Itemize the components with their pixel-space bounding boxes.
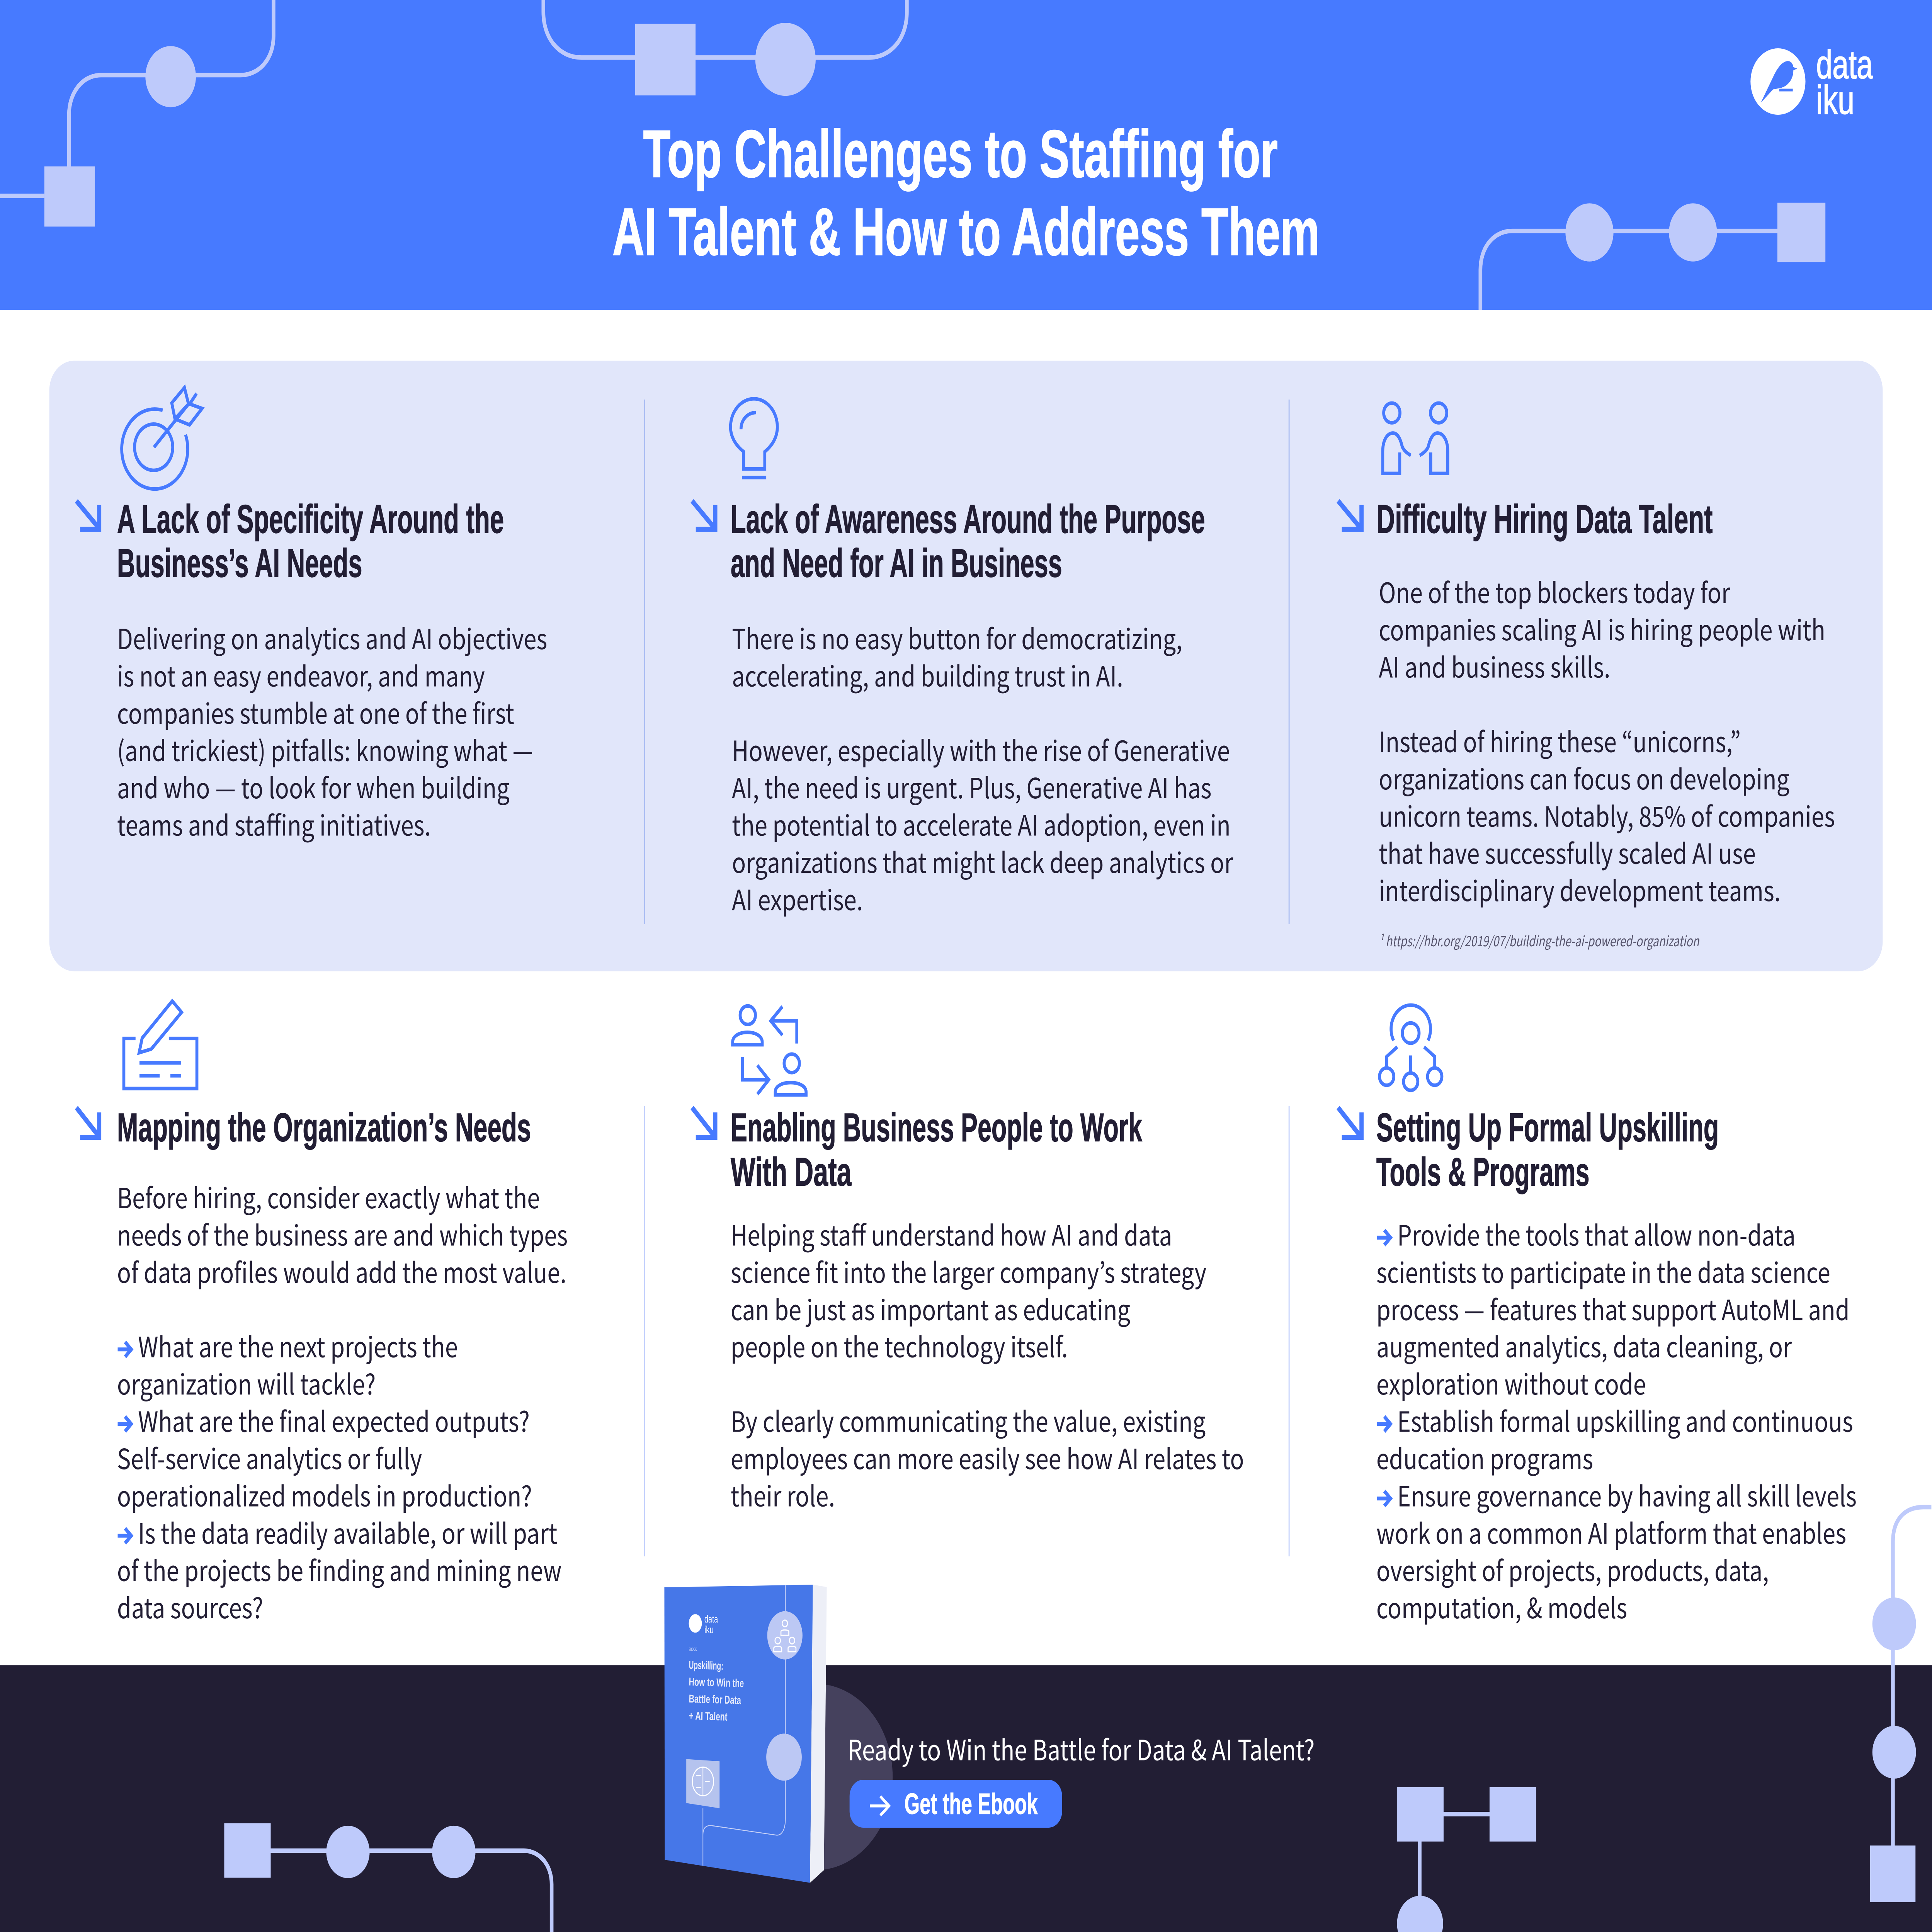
column divider bbox=[645, 400, 1289, 924]
heading: A Lack of Specificity Around the bbox=[117, 497, 504, 542]
cover title bbox=[689, 1647, 744, 1723]
background circle behind ebook bbox=[739, 1684, 893, 1870]
body text: interdisciplinary development teams. bbox=[1379, 869, 1781, 910]
heading bbox=[731, 497, 1205, 586]
body text: of the projects be finding and mining new bbox=[117, 1549, 562, 1589]
heading: Setting Up Formal Upskilling bbox=[1376, 1105, 1719, 1150]
logo: dataiku: iku bbox=[1816, 78, 1854, 122]
body text: unicorn teams. Notably, 85% of companies bbox=[1379, 794, 1835, 835]
body text: Before hiring, consider exactly what the bbox=[117, 1176, 540, 1217]
body text: Provide the tools that allow non-data bbox=[1397, 1214, 1796, 1254]
logo: dataiku bbox=[1750, 43, 1873, 122]
cover title: How to Win the bbox=[689, 1675, 744, 1690]
body text: Ensure governance by having all skill levels bbox=[1397, 1475, 1857, 1515]
body text: people on the technology itself. bbox=[731, 1325, 1068, 1366]
body text: their role. bbox=[731, 1475, 835, 1515]
cover title: + AI Talent bbox=[689, 1709, 728, 1723]
arrow marker bbox=[77, 1108, 99, 1138]
icon: target with arrow bbox=[122, 388, 202, 489]
body text: Self-service analytics or fully bbox=[117, 1437, 422, 1478]
body text: AI, the need is urgent. Plus, Generative AI has bbox=[732, 766, 1212, 807]
brain tile on cover bbox=[686, 1759, 719, 1808]
body text: science fit into the larger company’s strategy bbox=[731, 1251, 1206, 1291]
body text: There is no easy button for democratizing, bbox=[732, 617, 1182, 658]
decoration: right-edge circuit bbox=[1870, 1507, 1931, 1902]
heading bbox=[731, 1105, 1143, 1195]
body text: (and trickiest) pitfalls: knowing what — bbox=[117, 729, 533, 769]
arrow marker bbox=[692, 1108, 715, 1138]
body text: organizations can focus on developing bbox=[1379, 757, 1789, 798]
heading: With Data bbox=[731, 1150, 852, 1195]
button: get the ebook bbox=[850, 1780, 1062, 1828]
body text bbox=[1376, 1214, 1862, 1627]
body text: However, especially with the rise of Generative bbox=[732, 729, 1230, 769]
solution 1: mapping needs bbox=[77, 1001, 573, 1627]
body text: employees can more easily see how AI relates to bbox=[731, 1437, 1244, 1478]
icon: two people bbox=[1383, 403, 1448, 473]
body text: teams and staffing initiatives. bbox=[117, 804, 431, 844]
body text: data sources? bbox=[117, 1586, 263, 1627]
heading: and Need for AI in Business bbox=[731, 541, 1062, 586]
heading: Enabling Business People to Work bbox=[731, 1105, 1143, 1150]
body text: that have successfully scaled AI use bbox=[1379, 832, 1756, 872]
cover circles bbox=[766, 1611, 803, 1781]
challenge 2: lack of awareness bbox=[692, 399, 1238, 918]
cover title: Upskilling: bbox=[689, 1659, 723, 1672]
cover title: EBOOK bbox=[689, 1647, 697, 1652]
body text: AI expertise. bbox=[732, 878, 863, 918]
solution 2: enabling business people bbox=[692, 1006, 1249, 1515]
title: Top Challenges to Staffing for bbox=[643, 116, 1278, 191]
book front bbox=[664, 1585, 813, 1883]
footer band bbox=[0, 1507, 1932, 1932]
cover title: Battle for Data bbox=[689, 1692, 742, 1707]
body text bbox=[117, 1176, 573, 1627]
challenge 1: lack of specificity bbox=[77, 388, 553, 844]
decoration: top-center circuit bbox=[543, 0, 907, 96]
body text: process — features that support AutoML and bbox=[1376, 1288, 1850, 1328]
icon: people exchange bbox=[733, 1006, 806, 1095]
heading: Tools & Programs bbox=[1376, 1150, 1590, 1195]
header band bbox=[0, 0, 1932, 310]
body text: By clearly communicating the value, existing bbox=[731, 1400, 1206, 1440]
cover logo: iku bbox=[704, 1624, 714, 1636]
body text: Delivering on analytics and AI objectives bbox=[117, 617, 547, 658]
body text: organizations that might lack deep analytics or bbox=[732, 841, 1233, 881]
icon: document and pencil bbox=[124, 1001, 197, 1088]
heading: Business’s AI Needs bbox=[117, 541, 362, 586]
body text: of data profiles would add the most value. bbox=[117, 1251, 566, 1291]
body text: companies scaling AI is hiring people with bbox=[1379, 608, 1825, 649]
body text: operationalized models in production? bbox=[117, 1475, 532, 1515]
cover lines bbox=[703, 1585, 786, 1866]
body text: computation, & models bbox=[1376, 1586, 1627, 1627]
ebook cover bbox=[664, 1585, 827, 1883]
book pages bbox=[810, 1585, 827, 1883]
button: get the ebook: Get the Ebook bbox=[905, 1787, 1038, 1820]
decoration: footer-left circuit bbox=[224, 1823, 552, 1932]
body text: organization will tackle? bbox=[117, 1362, 376, 1403]
arrow marker bbox=[1338, 501, 1362, 529]
body text: scientists to participate in the data science bbox=[1376, 1251, 1830, 1291]
body text: work on a common AI platform that enables bbox=[1376, 1512, 1846, 1552]
solution 3: formal upskilling bbox=[1338, 1005, 1862, 1627]
logo: dataiku: data bbox=[1816, 43, 1873, 87]
icon: network bbox=[1379, 1005, 1442, 1090]
body text: accelerating, and building trust in AI. bbox=[732, 655, 1123, 695]
column dividers: solutions row bbox=[645, 1106, 1289, 1556]
cover logo bbox=[689, 1614, 718, 1636]
body text: exploration without code bbox=[1376, 1362, 1646, 1403]
body text: is not an easy endeavor, and many bbox=[117, 655, 485, 695]
bullet arrows bbox=[118, 1342, 131, 1543]
cover logo: data bbox=[704, 1614, 718, 1625]
decoration: top-right circuit bbox=[1480, 203, 1825, 310]
footnote: ¹ https://hbr.org/2019/07/building-the-ai-powered-organization bbox=[1379, 930, 1699, 951]
body text: oversight of projects, products, data, bbox=[1376, 1549, 1769, 1589]
body text: augmented analytics, data cleaning, or bbox=[1376, 1325, 1792, 1366]
body text: the potential to accelerate AI adoption, even in bbox=[732, 804, 1231, 844]
decoration: top-left circuit bbox=[0, 0, 274, 226]
arrow marker bbox=[692, 501, 715, 529]
title: AI Talent & How to Address Them bbox=[612, 194, 1320, 269]
body text: and who — to look for when building bbox=[117, 766, 510, 807]
bullet arrows bbox=[1377, 1230, 1391, 1506]
heading: Mapping the Organization’s Needs bbox=[117, 1105, 531, 1150]
call to action text: Ready to Win the Battle for Data & AI Talent? bbox=[848, 1728, 1315, 1769]
panel: challenges bbox=[49, 361, 1883, 971]
title bbox=[612, 116, 1320, 269]
icon: light bulb bbox=[731, 399, 777, 478]
button arrow bbox=[870, 1796, 889, 1815]
body text: education programs bbox=[1376, 1437, 1593, 1478]
heading bbox=[117, 497, 504, 586]
arrow marker bbox=[77, 501, 99, 529]
body text: AI and business skills. bbox=[1379, 646, 1611, 686]
arrow marker bbox=[1338, 1108, 1362, 1138]
body text: What are the final expected outputs? bbox=[138, 1400, 530, 1440]
body text: companies stumble at one of the first bbox=[117, 692, 514, 732]
decoration: footer-right squares bbox=[1397, 1787, 1536, 1932]
body text: Is the data readily available, or will part bbox=[138, 1512, 557, 1552]
body text: Helping staff understand how AI and data bbox=[731, 1214, 1172, 1254]
body text: One of the top blockers today for bbox=[1379, 571, 1730, 611]
body text: needs of the business are and which types bbox=[117, 1214, 568, 1254]
challenge 3: difficulty hiring bbox=[1338, 403, 1840, 951]
body text: Instead of hiring these “unicorns,” bbox=[1379, 720, 1741, 760]
body text: Establish formal upskilling and continuous bbox=[1397, 1400, 1853, 1440]
body text: What are the next projects the bbox=[138, 1325, 458, 1366]
heading bbox=[1376, 1105, 1719, 1195]
body text: can be just as important as educating bbox=[731, 1288, 1130, 1328]
heading: Difficulty Hiring Data Talent bbox=[1376, 497, 1713, 542]
heading: Lack of Awareness Around the Purpose bbox=[731, 497, 1205, 542]
people icon on cover bbox=[774, 1620, 796, 1652]
